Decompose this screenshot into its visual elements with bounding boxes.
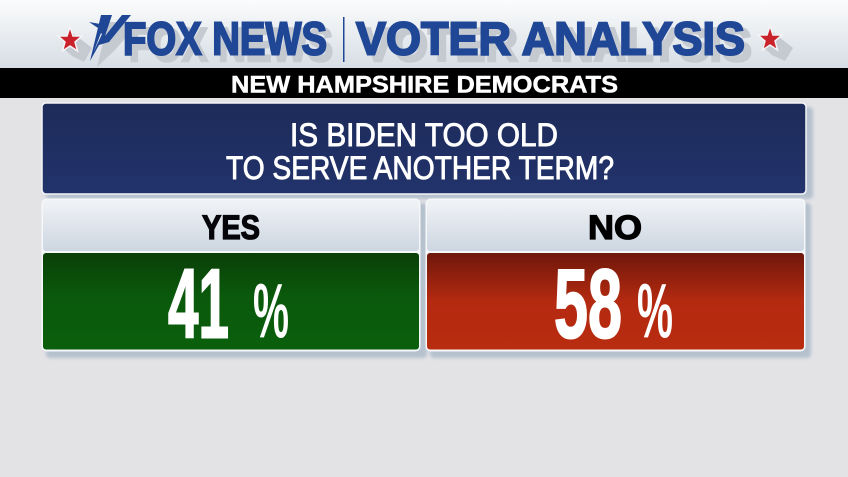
value: 58: 58 [554,248,622,358]
title: Fox News Voter Analysis [58,12,793,71]
panel: yes [42,198,427,358]
subtitle bar [0,68,848,98]
panel: no [426,198,811,358]
wordmark: FOX NEWS: FOX NEWS [123,12,327,64]
logo: Fox News searchlights [89,15,139,67]
subtitle text: NEW HAMPSHIRE DEMOCRATS [231,72,618,98]
question line 1: IS BIDEN TOO OLD [290,117,558,153]
label: no: NO [588,209,642,247]
icon: left star [58,27,92,62]
panel: question [42,103,813,199]
percent sign: % [637,268,673,354]
title text: VOTER ANALYSIS: VOTER ANALYSIS [356,12,745,64]
divider [343,17,344,62]
header band [0,0,848,69]
wordmark shadow: FOX NEWS [129,18,333,71]
question line 2: TO SERVE ANOTHER TERM? [226,150,614,186]
label: yes: YES [202,209,260,247]
percent sign: % [253,268,289,354]
value: 41: 41 [168,248,229,358]
icon: right star [758,26,793,61]
title shadow: VOTER ANALYSIS [363,18,752,71]
